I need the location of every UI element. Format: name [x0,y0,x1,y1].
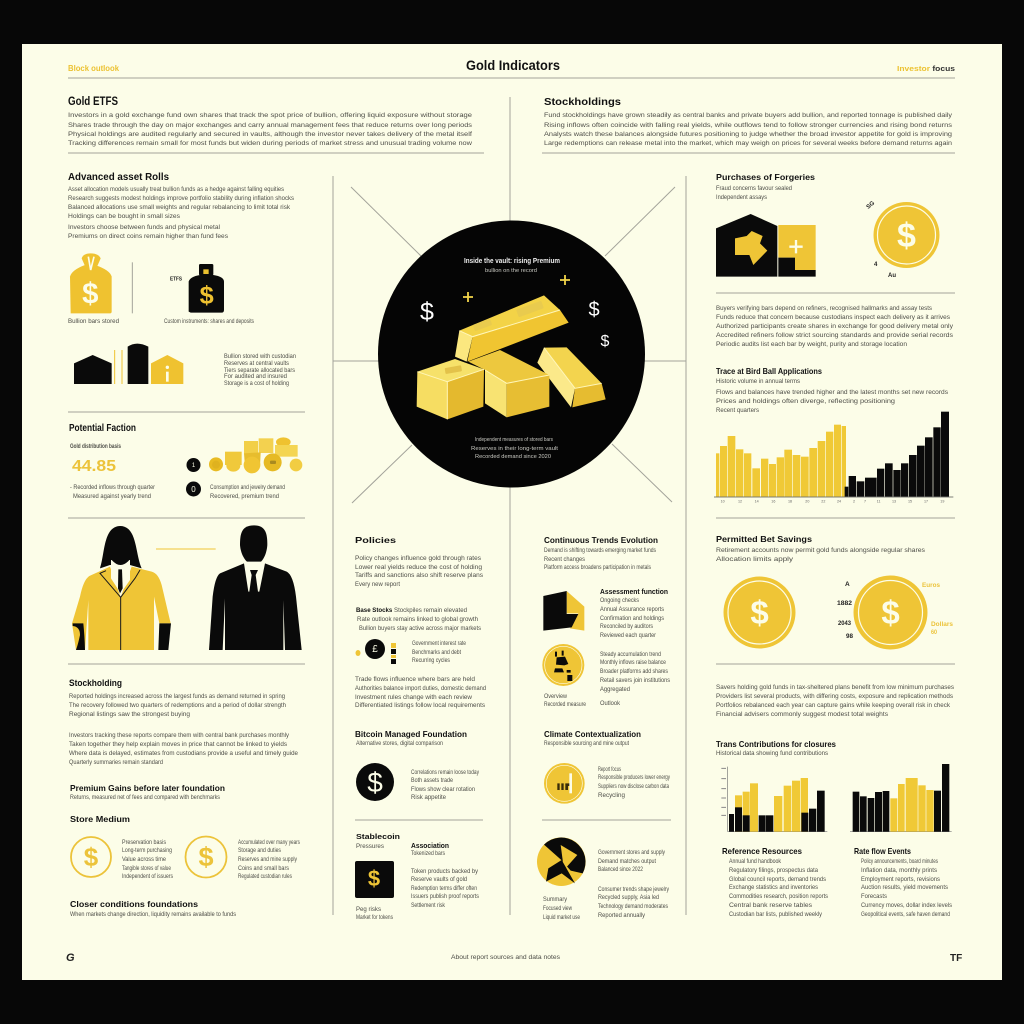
text block: stockholding [69,693,298,766]
list right: Auction results, yield movements [861,884,948,891]
icon: black number dots [186,458,201,496]
heading: closer conditions: Closer conditions foundations [70,899,198,909]
text block: policies: Rate outlook remains linked to global growth [357,616,478,623]
bar chart [714,412,953,503]
heading: Permitted Bet Savings [716,534,812,544]
coin labels [837,581,953,640]
footer [66,952,962,964]
bar chart: 15 [908,499,912,503]
footer center text: About report sources and data notes [451,954,560,961]
heading: potential faction: Potential Faction [69,423,136,434]
text [411,769,480,801]
bar chart: 24 [837,499,841,503]
bar chart: 2 [853,499,855,503]
panel: center gold circle [378,220,645,488]
bar chart: 11 [877,499,881,503]
text block: Buyers verifying bars depend on refiners, recognised hallmarks and assay tests [716,305,932,312]
panel: Purchases of Forgeries [716,172,955,348]
text: assessment: Reviewed each quarter [600,632,657,639]
heading: store medium: Store Medium [70,814,130,824]
coin text right [238,839,300,880]
icon: yellow dollar coin: $ [897,217,916,255]
text block: advanced asset: Investors choose between funds and physical metal [68,224,220,231]
bar chart right [850,764,952,832]
text block: Stockholdings [544,112,953,147]
icon caption: Benchmarks and debt [412,649,461,656]
text: assessment: Annual Assurance reports [600,606,664,613]
text block: policies: Every new report [355,581,400,588]
dots caption: Recovered, premium trend [210,493,279,500]
footer left mark: G [66,952,75,964]
text: Demand matches output [598,858,656,865]
text block: policies lower: Authorities balance import duties, domestic demand [355,685,486,692]
bar chart: 13 [892,499,896,503]
coin text right: Accumulated over many years [238,839,300,846]
coin text right: Storage and duties [238,847,281,854]
bar chart: 14 [755,499,759,503]
heading: stablecoin: Stablecoin [356,832,400,841]
text: Independent assays [716,194,767,201]
text block: Gold ETFs: Tracking differences remain small for most funds but widen during periods of market stress and unusual trading volume now [68,140,472,147]
panel: Climate contextualization [542,729,671,820]
icon: coin and stack [356,639,396,664]
text: Flows show clear rotation [411,786,475,793]
list right: Inflation data, monthly prints [861,867,937,874]
label: Pressures [356,843,384,850]
coin text right: Regulated custodian rules [238,873,292,880]
number note: - Recorded inflows through quarter [70,484,156,491]
text block: stockholding: Taken together they help explain moves in price that cannot be linked to yields [69,741,287,748]
panel: Policies [355,535,486,709]
closing text: When markets change direction, liquidity remains available to funds [70,911,236,918]
bar chart left [721,767,827,832]
text: Recent changes [544,556,585,563]
text block: Financial advisers commonly suggest modest total weights [716,711,888,718]
panel: Stockholdings [542,96,955,153]
text block: Providers list several products, with differing costs, exposure and replication methods [716,693,953,700]
coin text left: Tangible stores of value [122,865,171,872]
heading: advanced asset: Advanced asset Rolls [68,172,169,183]
text block: Stockholdings: Large redemptions can release metal into the market, which may weigh on prices for several weeks before demand returns again [544,140,952,147]
text block: policies lower [355,676,486,709]
coin labels: 98 [846,633,853,640]
panel: Potential Faction [68,423,305,518]
text: Fraud concerns favour sealed [716,185,792,192]
text: Consumer trends shape jewelry [598,886,670,893]
coin labels: 60 [931,629,937,636]
buildings caption: Bullion stored with custodian [224,353,296,360]
bag captions: Bullion bars stored [68,318,119,325]
heading: association: Association [411,841,449,850]
subheading text: Returns, measured net of fees and compared with benchmarks [70,794,220,801]
text: Recycled supply, Asia led [598,894,659,901]
icon: man in black suit [209,525,302,650]
text: coin: Steady accumulation trend [600,651,661,658]
text: Recycling [598,792,625,799]
text block: Periodic audits list each bar by weight, purity and storage location [716,341,907,348]
text: Issuers publish proof reports [411,893,479,900]
text block: advanced asset: Premiums on direct coins remain higher than fund fees [68,233,228,240]
panel: Continuous trends [542,535,670,708]
icon: outlined coin right [186,836,226,878]
text block [716,305,954,348]
coin labels: 2043 [838,620,851,627]
circle caption top [464,258,560,274]
text block: Portfolios rebalanced each year can capture gains while keeping overall risk in check [716,702,951,709]
text: Settlement risk [411,902,446,909]
frame lines [333,97,686,915]
text: assessment: Ongoing checks [600,597,639,604]
heading: rate flow events: Rate flow Events [854,846,911,856]
text: Both assets trade [411,777,453,784]
bar chart: 18 [788,499,792,503]
list left: Annual fund handbook [729,858,782,865]
text block: policies: Tariffs and sanctions also shift reserve plans [355,572,483,579]
label: Tokenized bars [411,850,445,857]
list right [861,858,952,918]
text block: policies: Bullion buyers stay active across major markets [359,625,481,632]
text: coin: Monthly inflows raise balance [600,659,666,666]
buildings caption: Reserves at central vaults [224,360,289,367]
list left: Commodities research, position reports [729,893,828,900]
icon caption: Recurring cycles [412,657,450,664]
text: Market for tokens [356,914,393,921]
text [544,547,656,571]
coin labels: SG [866,200,876,211]
text: Token products backed by [411,868,479,875]
list right: Policy announcements, board minutes [861,858,938,865]
text block: advanced asset: Balanced allocations use small weights and regular rebalancing to limit total risk [68,204,291,211]
icon: black number dots: 0 [191,485,196,494]
label: Gold distribution basis [70,443,121,450]
text block: Stockholdings: Rising inflows often coincide with falling real yields, while outflows tend to follow stronger currencies and rising bond returns [544,122,952,129]
bar chart: 22 [821,499,825,503]
text: Prices and holdings often diverge, reflecting positioning [716,398,896,405]
text: Balanced since 2022 [598,866,643,873]
panel: market balance [537,837,670,921]
bag captions [68,318,254,325]
number note [70,484,156,500]
text block: policies: Lower real yields reduce the cost of holding [355,564,482,571]
coin text left [122,839,173,880]
coin text left: Value across time [122,856,166,863]
icon: big coin left: $ [750,594,769,631]
icon: big coin left [724,576,796,648]
text: Technology demand moderates [598,903,668,910]
icon: black dollar square: $ [368,866,380,891]
icon: house and block [716,214,816,277]
text block: Gold ETFs: Shares trade through the day on major exchanges and carry annual management fees that reduce returns over long periods [68,122,472,129]
text: assessment: Reconciled by auditors [600,623,653,630]
text block: advanced asset: Holdings can be bought in small sizes [68,213,180,220]
panel: Trans contributions [716,739,952,918]
text: coin [544,651,670,708]
text: Summary [543,896,568,903]
icon: black number dots: 1 [192,463,196,469]
icon: woman in yellow jacket [72,526,171,650]
text [716,547,925,563]
text: Platform access broadens participation in metals [544,564,651,571]
text: Peg risks [356,906,381,913]
list right: Employment reports, revisions [861,876,940,883]
text: Report focus [598,766,621,773]
text: Focused view [543,905,572,912]
list right: Currency moves, dollar index levels [861,902,952,909]
bar chart: 10 [721,499,725,503]
text: Redemption terms differ often [411,885,477,892]
icon: money bags [70,253,224,313]
circle caption top: bullion on the record [485,268,537,274]
text: Demand is shifting towards emerging market funds [544,547,656,554]
coin text left: Long-term purchasing [122,847,172,854]
text block: advanced asset [68,186,294,240]
buildings caption: Storage is a cost of holding [224,380,289,387]
heading: Gold ETFs: Gold ETFS [68,96,118,108]
text: Government stores and supply [598,849,666,856]
text: coin: Broader platforms add shares [600,668,668,675]
list left: Central bank reserve tables [729,902,812,909]
text: coin: Retail savers join institutions [600,677,670,684]
icon caption: Government interest rate [412,640,466,647]
text: Responsible producers lower energy [598,774,671,781]
panel: Stablecoin [355,832,479,921]
text block: Funds reduce that concern because custodians inspect each delivery as it arrives [716,314,950,321]
icon: outlined coin left [71,837,111,877]
icon: yellow dollar coin [874,202,940,268]
text block: stockholding: The recovery followed two quarters of redemptions and a period of dollar strength [69,702,286,709]
list right: Geopolitical events, safe haven demand [861,911,950,918]
text block: stockholding: Investors tracking these reports compare them with central bank purchases monthly [69,732,290,739]
icon: outlined coin left: $ [84,842,99,872]
text: Retirement accounts now permit gold funds alongside regular shares [716,547,925,554]
text [716,378,948,414]
text [543,849,670,921]
coin text left: Independent of issuers [122,873,173,880]
text: assessment [600,589,668,639]
connector line [156,547,216,550]
text: coin: Overview [544,693,567,700]
bar chart: 19 [940,499,944,503]
heading: policies: Policies [355,535,396,545]
bar chart: 7 [864,499,866,503]
icon: coin and stack: £ [372,644,378,655]
panel: Bitcoin managed [355,729,483,820]
panel: Gold ETFs [68,96,484,153]
heading: Purchases of Forgeries [716,172,815,182]
text block: advanced asset: Asset allocation models usually treat bullion funds as a hedge against falling equities [68,186,284,193]
list left: Regulatory filings, prospectus data [729,867,818,874]
coin text right: Reserves and mine supply [238,856,298,863]
heading: stockholding: Stockholding [69,678,122,689]
text block: policies [355,555,483,632]
subheading: Historical data showing fund contributions [716,750,828,757]
icon: gold bars [417,295,606,419]
text: Allocation limits apply [716,556,794,563]
icon: gold coin pile [209,437,302,473]
big number: 44.85 [72,458,116,475]
icon: money bags: $ [200,281,214,309]
text [716,185,792,201]
text block: Authorized participants create shares in exchange for good delivery metal only [716,323,954,330]
text: Historic volume in annual terms [716,378,800,385]
text block: policies: Base Stocks Stockpiles remain elevated [356,607,467,614]
text block: Gold ETFs: Investors in a gold exchange fund own shares that track the spot price of bullion, offering liquid exposure without storage [68,112,473,119]
icon: outlined coin right: $ [198,842,214,872]
text block: Gold ETFs: Physical holdings are audited regularly and secured in vaults, although the investor never takes delivery of the metal itself [68,131,472,138]
header [68,58,955,78]
text: Suppliers now disclose carbon data [598,783,669,790]
icon: dollar signs and sparkles [420,275,610,350]
circle caption bottom [471,437,558,460]
text block: Gold ETFs [68,112,473,147]
text: Reported annually [598,912,646,919]
list left: Exchange statistics and inventories [729,884,818,891]
subheading: Responsible sourcing and mine output [544,740,629,747]
text block: policies: Policy changes influence gold through rates [355,555,481,562]
black circle [378,220,645,488]
icon: big coin right: $ [881,594,900,631]
footer right mark: TF [950,953,962,964]
panel: Permitted Bet Savings [716,534,955,718]
text block: policies lower: Investment rules change with each review [355,694,472,701]
icon: black and yellow block [543,591,584,631]
coin text left: Preservation basis [122,839,166,846]
heading: Stockholdings: Stockholdings [544,96,621,108]
text block: policies lower: Differentiated listings follow local requirements [355,702,485,709]
text: Recent quarters [716,407,759,414]
text block: Savers holding gold funds in tax-sheltered plans benefit from low minimum purchases [716,684,954,691]
circle caption bottom: Recorded demand since 2020 [475,454,551,460]
icon: money bags: ETFS [170,277,182,283]
heading: climate: Climate Contextualization [544,729,641,739]
icon: dollar signs and sparkles: $ [420,298,434,326]
text block: policies lower: Trade flows influence where bars are held [355,676,475,683]
coin labels: Euros [922,582,940,589]
buildings caption [224,353,296,387]
text block: stockholding: Reported holdings increased across the largest funds as demand returned in spring [69,693,285,700]
text: Liquid market use [543,914,580,921]
header right label: Investor focus [897,64,955,73]
heading: premium gains: Premium Gains before later foundation [70,783,225,793]
text block: Accredited refiners follow strict sourcing standards and provide serial records [716,332,953,339]
bar chart: 20 [805,499,809,503]
bar chart: 17 [924,499,928,503]
icon: money bags: $ [82,277,98,310]
text block: stockholding: Quarterly summaries remain standard [69,759,163,766]
dots caption: Consumption and jewelry demand [210,484,285,491]
circle caption bottom: Independent measures of stored bars [475,437,553,443]
icon: dollar signs and sparkles: $ [588,299,600,321]
icon caption [412,640,466,664]
heading: reference resources: Reference Resources [722,846,802,856]
dots caption [210,484,285,500]
text: Reserve vaults of gold [411,876,467,883]
number note: Measured against yearly trend [73,493,151,500]
buildings caption: Tiers separate allocated bars [224,367,295,374]
text: coin: Aggregated [600,686,630,693]
icon: black dollar coin: $ [367,767,383,798]
list left: Global council reports, demand trends [729,876,826,883]
subheading: Alternative stores, digital comparison [356,740,443,747]
icon: yellow coin with marks [542,644,584,686]
icon: big coin right [854,576,928,650]
coin labels: 1882 [837,600,852,607]
text: Flows and balances have trended higher and the latest months set new records [716,389,948,396]
bar chart: 12 [738,499,742,503]
coin labels: A [845,581,850,588]
text block: Stockholdings: Analysts watch these balances alongside futures positioning to judge whether the broad investor appetite for gold is improving [544,131,953,138]
text [598,766,671,799]
heading: Trace at Bird Ball Applications [716,366,822,376]
coin text right: Coins and small bars [238,865,289,872]
text: coin: Recorded measure [544,701,586,708]
panel: Advanced asset roles [68,172,305,412]
buildings caption: For audited and insured [224,373,287,380]
bar chart: 16 [771,499,775,503]
text: assessment: Assessment function [600,589,668,596]
text [356,868,479,921]
list right: Forecasts [861,893,887,900]
icon: vault buildings [74,344,183,384]
coin labels: Au [888,273,896,279]
panel: investor figures [72,525,302,650]
text: assessment: Confirmation and holdings [600,615,664,622]
icon: yellow coin [544,763,585,804]
text block: Stockholdings: Fund stockholdings have grown steadily as central banks and private buyers add bullion, and reported tonnage is published daily [544,112,953,119]
text: coin: Outlook [600,700,621,707]
panel: Stockholding notes [69,678,300,918]
icon: black and yellow round mark [537,837,586,886]
icon: dollar signs and sparkles: $ [601,333,610,350]
text: Correlations remain loose today [411,769,480,776]
main title: Gold Indicators [466,58,560,73]
circle caption bottom: Reserves in their long-term vault [471,446,558,452]
text block [716,684,954,718]
coin labels: 4 [874,262,878,268]
header left label: Block outlook [68,64,120,73]
list left: Custodian bar lists, published weekly [729,911,823,918]
text: Risk appetite [411,794,446,801]
list left [729,858,828,918]
heading: continuous trends: Continuous Trends Evolution [544,535,658,545]
text block: stockholding: Where data is delayed, estimates from custodians provide a useful and timely guide [69,750,298,757]
panel: bar chart one [714,366,955,518]
bag captions: Custom instruments: shares and deposits [164,318,254,325]
circle caption top: Inside the vault: rising Premium [464,258,560,265]
heading: bitcoin managed: Bitcoin Managed Foundation [355,729,467,739]
heading: Trans Contributions for closures [716,739,836,749]
coin labels [866,200,896,279]
text block: advanced asset: Research suggests modest holdings improve portfolio stability during inflation shocks [68,195,294,202]
coin labels: Dollars [931,621,953,628]
text block: stockholding: Regional listings saw the strongest buying [69,711,190,718]
